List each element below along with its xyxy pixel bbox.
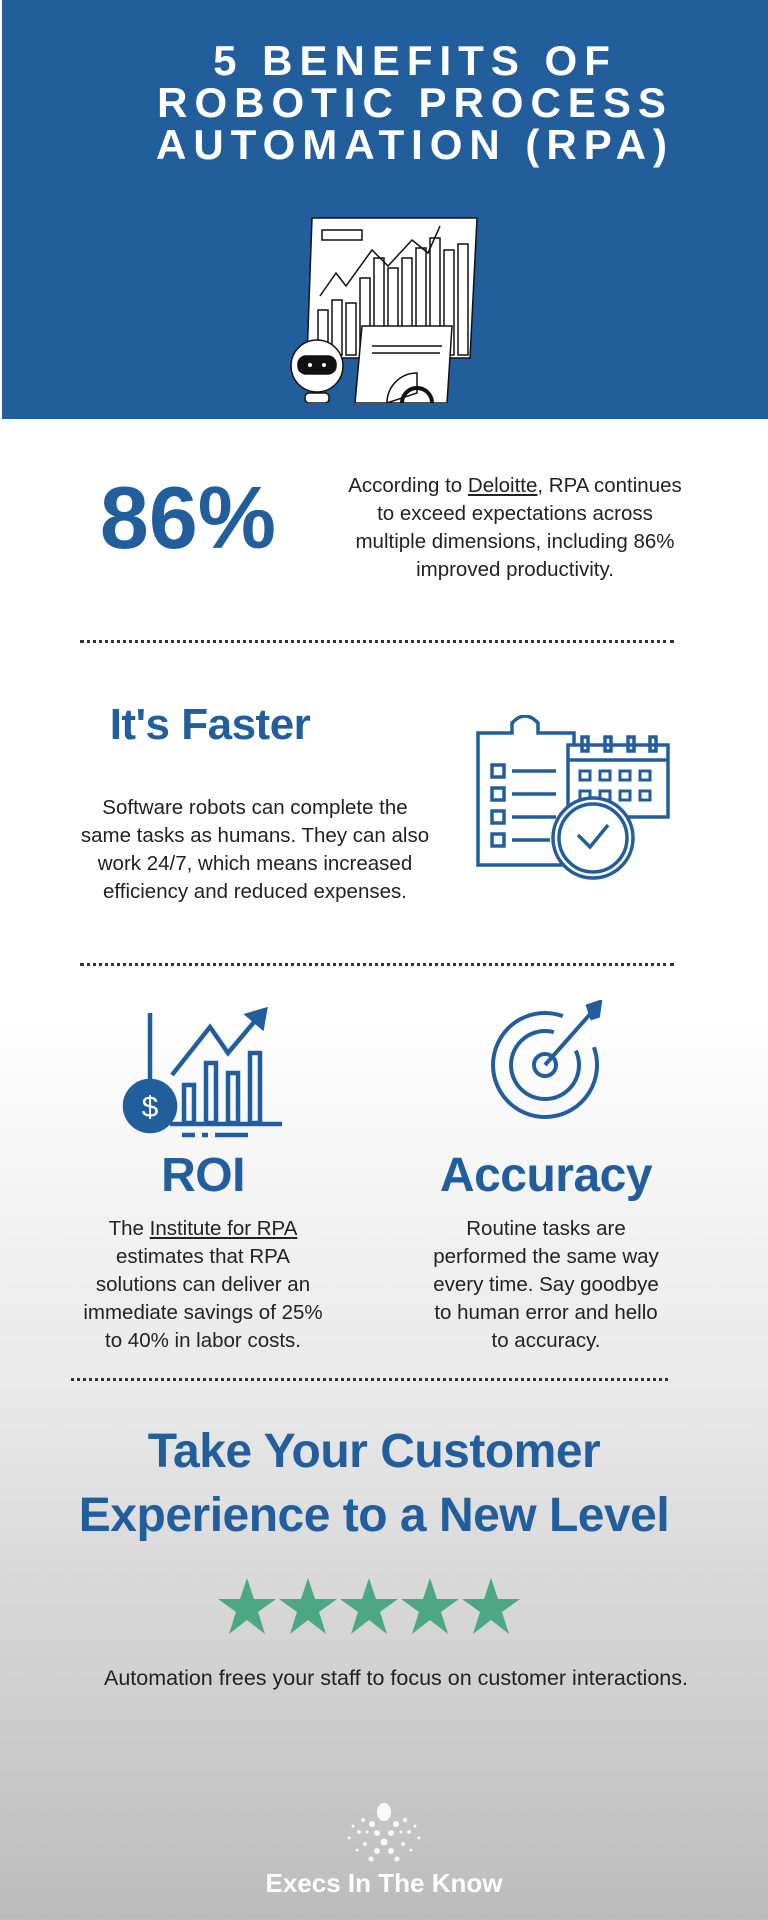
logo text: Execs In The Know bbox=[266, 1868, 502, 1898]
closing text: Automation frees your staff to focus on customer interactions. bbox=[104, 1666, 688, 1690]
stat text: to exceed expectations across bbox=[377, 502, 653, 525]
title bbox=[156, 37, 674, 168]
heading: Accuracy: Accuracy bbox=[440, 1149, 652, 1202]
stat: 86%: 86% bbox=[100, 468, 276, 567]
logo mark bbox=[348, 1803, 420, 1862]
faster text: efficiency and reduced expenses. bbox=[103, 880, 407, 903]
ROI text: The Institute for RPA bbox=[109, 1217, 297, 1240]
rating stars bbox=[218, 1578, 520, 1634]
stat text: multiple dimensions, including 86% bbox=[355, 530, 675, 553]
icon: ROI chart: $ bbox=[142, 1091, 159, 1124]
stat text bbox=[348, 474, 682, 581]
heading: customer experience: Take Your Customer bbox=[148, 1425, 600, 1478]
ROI text: immediate savings of 25% bbox=[83, 1301, 323, 1324]
icon: ROI chart bbox=[122, 1006, 282, 1138]
heading: customer experience bbox=[79, 1425, 669, 1542]
faster text: same tasks as humans. They can also bbox=[81, 824, 429, 847]
stat text: improved productivity. bbox=[416, 558, 614, 581]
heading: ROI: ROI bbox=[161, 1149, 245, 1202]
faster text: Software robots can complete the bbox=[102, 796, 408, 819]
ROI text: to 40% in labor costs. bbox=[105, 1329, 301, 1352]
icon: target bbox=[491, 1000, 602, 1119]
stat text: According to Deloitte, RPA continues bbox=[348, 474, 682, 497]
ROI text bbox=[83, 1217, 323, 1352]
accuracy text: to human error and hello bbox=[434, 1301, 658, 1324]
faster text bbox=[81, 796, 429, 903]
heading: customer experience: Experience to a New Level bbox=[79, 1489, 669, 1542]
heading: It's Faster: It's Faster bbox=[110, 700, 310, 749]
accuracy text: every time. Say goodbye bbox=[433, 1273, 659, 1296]
ROI text: solutions can deliver an bbox=[96, 1273, 310, 1296]
logo bbox=[266, 1803, 502, 1898]
title: AUTOMATION (RPA) bbox=[156, 121, 674, 168]
icon: clipboard calendar clock bbox=[476, 715, 670, 880]
title: 5 BENEFITS OF bbox=[213, 37, 617, 84]
illustration: robot with charts bbox=[290, 217, 478, 403]
title: ROBOTIC PROCESS bbox=[157, 79, 673, 126]
accuracy text: to accuracy. bbox=[492, 1329, 600, 1352]
header panel bbox=[2, 0, 768, 419]
ROI text: estimates that RPA bbox=[116, 1245, 290, 1268]
accuracy text bbox=[433, 1217, 659, 1352]
accuracy text: Routine tasks are bbox=[466, 1217, 626, 1240]
faster text: work 24/7, which means increased bbox=[98, 852, 412, 875]
accuracy text: performed the same way bbox=[433, 1245, 659, 1268]
